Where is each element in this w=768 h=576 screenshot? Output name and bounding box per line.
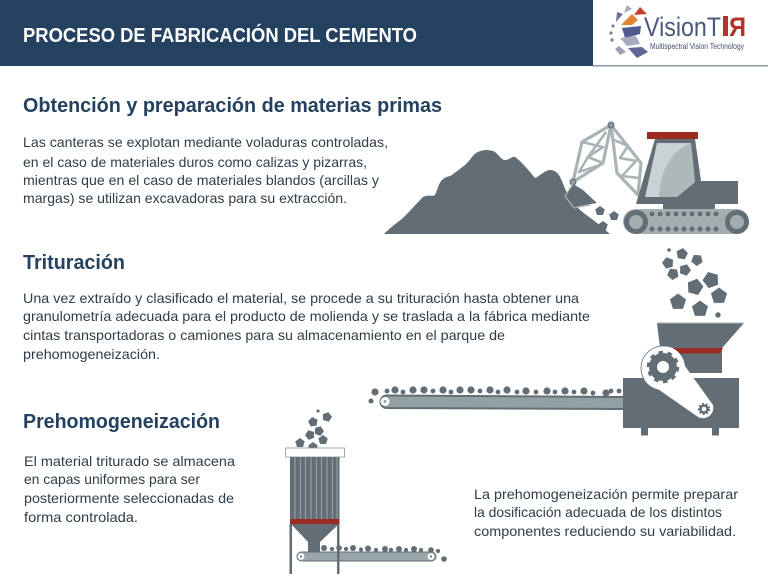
hopper: [657, 323, 744, 373]
illustration: mountain of raw material: [384, 150, 610, 234]
text block: materias primas: mientras que en el caso de materiales blandos (arcillas y: [23, 172, 379, 188]
crawler track: [623, 209, 749, 234]
logo: VisionTIR: R: [729, 12, 746, 42]
illustration: excavator: [565, 122, 749, 234]
header bar: [0, 0, 768, 66]
heading: trituración: Trituración: [23, 252, 125, 274]
text block: prehomogeneización left: forma controlada.: [24, 509, 138, 525]
text block: prehomogeneización right: [474, 486, 738, 539]
text block: materias primas: Las canteras se explotan mediante voladuras controladas,: [23, 134, 388, 150]
crusher body: [623, 378, 739, 428]
small gear: [700, 406, 708, 412]
text block: prehomogeneización left: El material triturado se almacena: [24, 453, 235, 469]
illustration: conveyor belt to crusher: [368, 386, 624, 409]
logo: VisionTIR: Multispectral Vision Technology: [650, 42, 744, 51]
text block: trituración: cintas transportadoras o camiones para su almacenamiento en el parque de: [23, 327, 505, 343]
text block: prehomogeneización left: [24, 453, 235, 525]
title: PROCESO DE FABRICACIÓN DEL CEMENTO: [23, 23, 417, 47]
text block: materias primas: [23, 134, 388, 206]
text block: trituración: granulometría adecuada para el producto de molienda y se traslada a la fábrica mediante: [23, 308, 590, 324]
rocks on lower belt: [321, 545, 447, 562]
excavator arm trusses: [573, 125, 641, 195]
heading: materias primas: Obtención y preparación de materias primas: [23, 95, 442, 117]
illustration: falling rocks above crusher: [661, 247, 727, 318]
cab: [636, 139, 738, 204]
large gear: [653, 357, 673, 377]
text block: materias primas: en el caso de materiales duros como calizas y pizarras,: [23, 154, 367, 170]
bucket: [565, 184, 597, 208]
text block: prehomogeneización left: en capas uniformes para ser: [24, 471, 200, 487]
text block: prehomogeneización right: La prehomogeneización permite preparar: [474, 486, 738, 502]
illustration: conveyor belt below silo: [297, 540, 447, 574]
text block: prehomogeneización right: la dosificación adecuada de los distintos: [474, 504, 722, 520]
text block: materias primas: margas) se utilizan excavadoras para su extracción.: [23, 190, 347, 206]
rocks on the belt: [368, 386, 621, 404]
illustration: crusher: [623, 322, 744, 436]
text block: trituración: prehomogeneización.: [23, 346, 160, 362]
text block: trituración: Una vez extraído y clasificado el material, se procede a su trituración hasta obtener una: [23, 290, 579, 306]
logo: VisionTIR: [609, 5, 746, 58]
illustration: rocks above silo: [295, 409, 333, 452]
illustration: silo: [286, 448, 344, 574]
text block: prehomogeneización right: componentes reduciendo su variabilidad.: [474, 523, 736, 539]
drive belt housing: [633, 338, 713, 418]
text block: prehomogeneización left: posteriormente seleccionadas de: [24, 490, 234, 506]
text block: trituración: [23, 290, 590, 362]
logo: VisionTIR: VisionT: [644, 12, 721, 42]
heading: prehomogeneización: Prehomogeneización: [23, 411, 220, 433]
